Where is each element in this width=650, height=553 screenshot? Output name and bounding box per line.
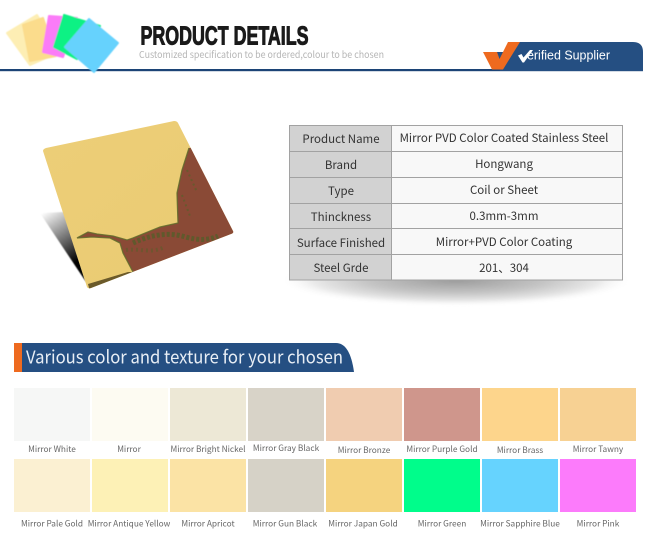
swatch: mirror gun black: Mirror Gun Black [253,518,318,530]
header rule [0,69,643,71]
row: steel grade: Steel Grde [313,260,369,276]
swatch: mirror apricot: Mirror Apricot [181,518,235,530]
row: steel grade [313,260,530,276]
badge: verified supplier: erified Supplier [527,48,610,62]
swatch: mirror pale gold: Mirror Pale Gold [21,518,83,530]
swatch: mirror sapphire blue [480,459,560,530]
swatch: mirror green: Mirror Green [418,518,466,530]
row: thickness: Thinckness [311,209,371,225]
swatch: mirror gray black [248,388,324,454]
swatch: mirror white [14,388,90,455]
swatch: mirror [92,388,168,455]
swatch: mirror bright nickel [170,388,246,455]
section banner: Various color and texture for your chosen [26,344,343,370]
swatch: mirror purple gold [404,388,480,455]
swatch: mirror bronze [326,388,402,456]
icon: fanned colour sheets [7,15,118,72]
swatch: mirror japan gold: Mirror Japan Gold [328,518,398,530]
swatch: mirror green [404,459,480,530]
swatch: mirror brass: Mirror Brass [497,444,543,456]
product photo: mirror gold plate with leaf reflection [42,121,234,288]
row: surface finished: Mirror+PVD Color Coating [436,234,573,250]
row: steel grade: 201、304 [479,260,530,276]
swatch: mirror apricot [170,459,246,530]
swatch: mirror tawny [560,388,636,455]
swatch: mirror antique yellow: Mirror Antique Yellow [88,518,171,530]
swatch: mirror japan gold [326,459,402,530]
swatch: mirror gun black [248,459,324,530]
row: product name: Mirror PVD Color Coated Stainless Steel [400,130,608,146]
row: brand: Hongwang [475,156,533,172]
row: thickness [311,208,538,225]
row: surface finished [297,234,573,251]
row: product name: Product Name [302,131,380,147]
specification table [289,125,623,280]
row: surface finished: Surface Finished [297,235,385,251]
row: type: Coil or Sheet [470,182,539,198]
table shadow [278,254,634,306]
swatch: mirror white: Mirror White [28,443,76,455]
swatch: mirror purple gold: Mirror Purple Gold [406,443,478,455]
swatch: mirror pale gold [14,459,90,530]
subtitle: Customized specification to be ordered,colour to be chosen [139,47,384,61]
swatch: mirror tawny: Mirror Tawny [573,443,624,455]
swatch: mirror pink [560,459,636,530]
swatch: mirror sapphire blue: Mirror Sapphire Blue [480,518,560,530]
swatch: mirror brass [482,388,558,456]
row: type [328,182,539,199]
swatch: mirror gray black: Mirror Gray Black [253,442,320,454]
swatch: mirror antique yellow [88,459,171,530]
row: type: Type [328,183,354,199]
swatch: mirror bright nickel: Mirror Bright Nickel [170,443,246,455]
swatch: mirror: Mirror [117,443,142,455]
swatch: mirror bronze: Mirror Bronze [338,444,391,456]
badge: verified supplier [483,42,643,71]
row: brand: Brand [325,157,357,173]
swatch: mirror pink: Mirror Pink [577,518,620,530]
row: thickness: 0.3mm-3mm [470,208,538,224]
row: product name [302,130,608,147]
title: PRODUCT DETAILS [140,22,308,50]
row: brand [325,156,533,173]
